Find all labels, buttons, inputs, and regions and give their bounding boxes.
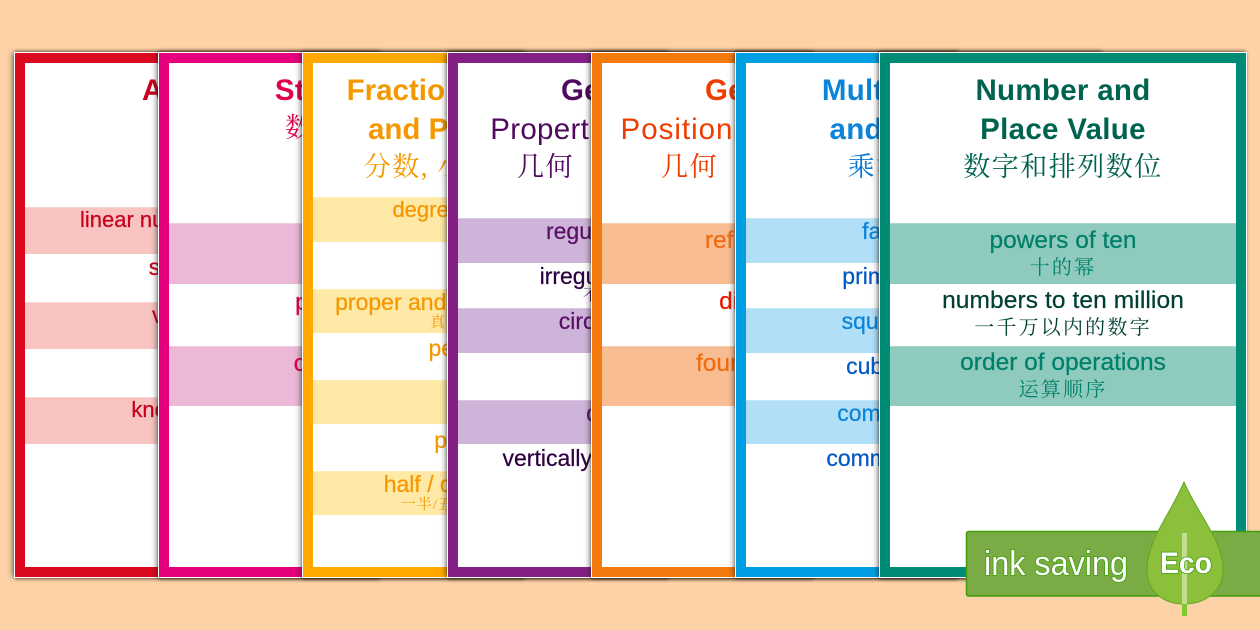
heading: Geometry - Position and Direction — [621, 74, 929, 182]
heading: Statistics — [275, 74, 409, 143]
band: circumference: circumference — [559, 308, 703, 334]
poster: Number and Place Value — [880, 53, 1246, 577]
band: common factors: common factors — [837, 400, 1001, 426]
heading: Statistics: 数据统计 — [285, 113, 399, 143]
heading: Number and Place Value — [963, 74, 1163, 182]
heading: Geometry - Properties of Shapes: Geometry — [561, 74, 701, 107]
band: half / quarter / one fifth: 一半/五分之一/四分之一 — [401, 497, 571, 513]
row: cube numbers: cube numbers — [846, 353, 992, 379]
band: degree of accuracy — [313, 197, 659, 242]
band: circumference — [458, 308, 804, 353]
heading: Number and Place Value: 数字和排列数位 — [963, 152, 1163, 182]
band: known values — [25, 397, 371, 444]
banner — [966, 532, 1260, 596]
heading: Fractions, Decimals and Percentages — [347, 74, 625, 182]
band: mean: mean — [311, 227, 373, 254]
heading: Multiplication and Division: and Division — [830, 113, 1008, 146]
band: linear number sequence: linear number sequence — [80, 207, 316, 232]
band: square number — [746, 308, 1092, 353]
poster: Multiplication and Division — [736, 53, 1102, 577]
band: variables: variables — [152, 302, 244, 328]
heading: Statistics: Statistics — [275, 74, 409, 107]
band: diameter: diameter — [586, 400, 676, 426]
band: proper and improper fractions: proper and improper fractions — [335, 289, 637, 315]
band: reflect shape — [602, 223, 948, 284]
row: numbers to ten million — [942, 287, 1184, 339]
heading: Number and Place Value: Place Value — [980, 113, 1146, 146]
band: order of operations — [890, 346, 1236, 406]
heading: Geometry - Position and Direction: Geometry — [705, 74, 845, 107]
band: powers of ten: powers of ten — [989, 227, 1137, 254]
band: degree of accuracy: degree of accuracy — [392, 197, 580, 222]
band: calculate — [169, 346, 515, 406]
band: powers of ten: 十的幂 — [1030, 257, 1096, 279]
row: vertically opposite angles: vertically opposite angles — [502, 445, 759, 471]
poster: Geometry - Properties of Shapes — [448, 53, 814, 577]
heading: Geometry - Properties of Shapes: 几何 图形的属性 — [517, 152, 745, 182]
band: regular polygons — [458, 218, 804, 263]
heading: Geometry - Properties of Shapes: Properties of Shapes — [490, 113, 772, 146]
band: proper and improper fractions — [313, 289, 659, 333]
band: factor pairs — [746, 218, 1092, 263]
band: order of operations: order of operations — [960, 349, 1166, 376]
band: common factors — [746, 400, 1092, 444]
row: pie chart: pie chart — [295, 289, 389, 316]
band: factor pairs: factor pairs — [862, 218, 976, 244]
row: irregular polygons — [540, 263, 722, 304]
banner text: ink saving: ink saving — [984, 545, 1128, 583]
heading: Multiplication and Division: 乘法和除法 — [848, 152, 990, 182]
row: prime numbers: prime numbers — [842, 263, 996, 289]
heading: Number and Place Value: Number and — [975, 74, 1151, 107]
band: half / quarter / one fifth: half / quarter / a fifth — [384, 471, 588, 497]
poster: Algebra — [15, 53, 381, 577]
heading: Algebra: Algebra — [142, 74, 254, 107]
row: numbers to ten million: 一千万以内的数字 — [974, 317, 1152, 339]
row: irregular polygons: irregular polygons — [540, 263, 722, 289]
band: mean — [169, 223, 515, 284]
band: diameter — [458, 400, 804, 444]
icon: leaf — [1147, 482, 1223, 616]
band: four quadrants — [602, 346, 948, 406]
heading: Fractions, Decimals and Percentages: 分数, 小数和百分数 — [364, 152, 608, 182]
heading: Geometry - Position and Direction: Position and Direction — [621, 113, 929, 146]
heading: Fractions, Decimals and Percentages: and Percentages — [368, 113, 604, 146]
row: proportion: proportion — [434, 427, 538, 453]
band: variables — [25, 302, 371, 349]
band: order of operations: 运算顺序 — [1019, 379, 1107, 401]
band: square number: square number — [842, 308, 996, 334]
row: percentage: percentage — [428, 335, 544, 361]
band: linear number sequence — [25, 207, 371, 254]
heading: Fractions, Decimals and Percentages: Fractions, Decimals — [347, 74, 625, 107]
row: common multiples: common multiples — [826, 445, 1012, 471]
band: powers of ten — [890, 223, 1236, 284]
poster: Statistics — [159, 53, 525, 577]
band: ratio: ratio — [464, 380, 508, 406]
band: ratio — [313, 380, 659, 424]
band: half / quarter / one fifth — [313, 471, 659, 515]
band: known values: known values — [131, 397, 265, 422]
row: substitute: substitute — [149, 254, 247, 280]
leaf text: Eco: Eco — [1160, 547, 1212, 580]
row: simplify: simplify — [448, 248, 524, 274]
heading: Geometry - Properties of Shapes — [490, 74, 772, 182]
poster: Geometry - Position and Direction — [592, 53, 958, 577]
band: regular polygons: regular polygons — [546, 218, 716, 244]
poster: Fractions, Decimals and Percentages — [303, 53, 669, 577]
row: irregular polygons: 不规则多边形 — [583, 288, 679, 304]
heading: Multiplication and Division — [822, 74, 1016, 182]
band: proper and improper fractions: 真分数和假分数 — [430, 315, 542, 331]
heading: Multiplication and Division: Multiplication — [822, 74, 1016, 107]
heading: Geometry - Position and Direction: 几何 位置和方向 — [661, 152, 889, 182]
band: calculate: calculate — [294, 350, 390, 377]
row: numbers to ten million: numbers to ten million — [942, 287, 1184, 314]
band: reflect shape: reflect shape — [705, 227, 845, 254]
band: four quadrants: four quadrants — [696, 350, 854, 377]
row: directional: directional — [719, 288, 831, 315]
